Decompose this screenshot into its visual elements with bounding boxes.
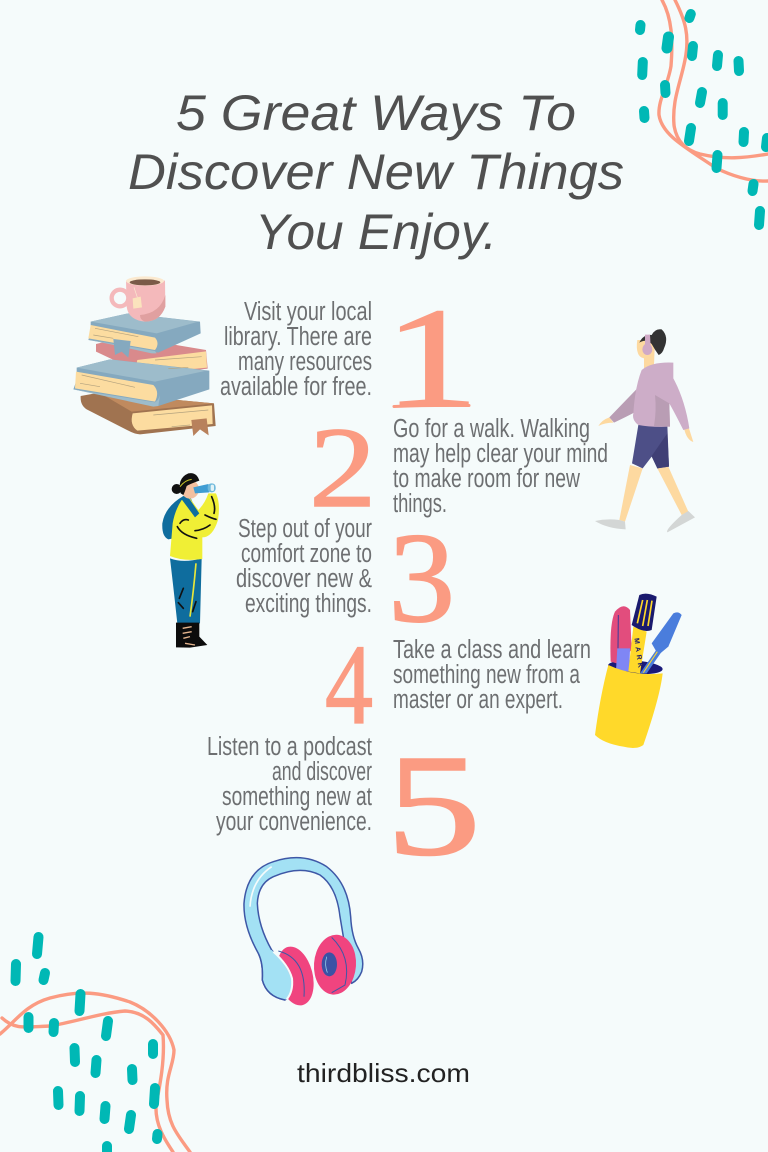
title: You Enjoy. (255, 204, 497, 260)
text: step 5 podcast: Listen to a podcast (207, 733, 372, 761)
illustration: walking woman (595, 329, 695, 532)
text: step 3 comfort zone: comfort zone to (241, 540, 372, 568)
number 1: 1 (384, 279, 479, 437)
text: step 3 comfort zone: Step out of your (238, 515, 372, 543)
text: step 5 podcast: your convenience. (216, 808, 372, 836)
illustration: pen cup (595, 594, 682, 748)
text: step 1 library: Visit your local (244, 298, 372, 326)
text: step 2 walk: may help clear your mind (393, 440, 608, 468)
text: step 2 walk (393, 415, 608, 518)
title: Discover New Things (128, 144, 624, 200)
text: step 1 library: many resources (238, 348, 372, 376)
text: step 4 class: master or an expert. (393, 686, 563, 714)
icon: stack of books with tea cup (73, 276, 216, 436)
text: step 1 library (220, 298, 372, 401)
illustration: headphones (244, 858, 363, 1009)
text: step 3 comfort zone: exciting things. (245, 590, 372, 618)
text: step 5 podcast: something new at (222, 783, 372, 811)
text: step 2 walk: things. (393, 490, 447, 518)
text: step 1 library: library. There are (224, 323, 372, 351)
number 2: 2 (309, 404, 376, 532)
footer website: thirdbliss.com (297, 1058, 470, 1088)
text: step 4 class (393, 636, 591, 714)
text: step 4 class: something new from a (393, 661, 581, 689)
decoration: top right squiggles and dashes (640, 0, 768, 225)
number 5: 5 (386, 724, 481, 886)
illustration: person with binoculars (162, 473, 219, 648)
text: step 5 podcast (207, 733, 372, 836)
title (128, 85, 624, 260)
text: step 3 comfort zone (236, 515, 372, 618)
decoration: bottom left squiggles and dashes (0, 937, 190, 1152)
number 4: 4 (325, 621, 373, 748)
text: step 4 class: Take a class and learn (393, 636, 591, 664)
text: step 5 podcast: and discover (272, 758, 372, 786)
title: 5 Great Ways To (176, 85, 576, 141)
text: step 1 library: available for free. (220, 373, 372, 401)
text: step 2 walk: Go for a walk. Walking (393, 415, 590, 443)
number 3: 3 (388, 507, 455, 650)
text: step 3 comfort zone: discover new & (236, 565, 372, 593)
illustration: pen cup: MARK (632, 638, 643, 668)
text: step 2 walk: to make room for new (393, 465, 580, 493)
